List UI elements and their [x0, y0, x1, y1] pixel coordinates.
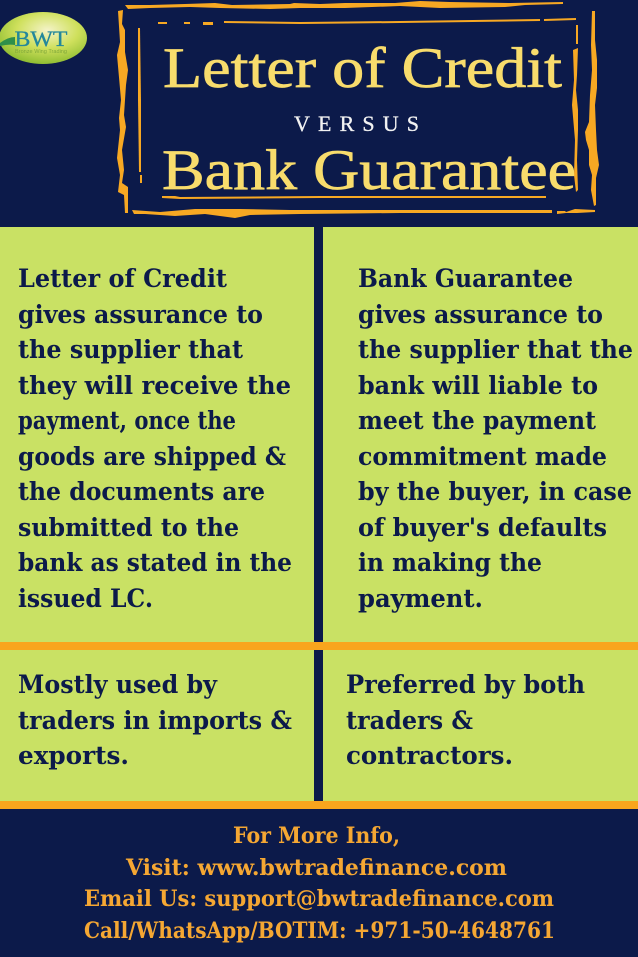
panel: letter of credit description: the documents are: [18, 477, 265, 507]
subtitle: versus: VERSUS: [294, 111, 419, 136]
panel: bank guarantee description: meet the payment: [358, 406, 596, 436]
panel: letter of credit description: goods are shipped &: [18, 442, 286, 472]
footer contact information: [84, 823, 555, 944]
panel: letter of credit usage: exports.: [18, 741, 129, 771]
logo: BWT: Bronze Wing Trading: [15, 49, 67, 55]
panel: bank guarantee usage: [346, 670, 585, 771]
panel: bank guarantee description: bank will liable to: [358, 371, 598, 401]
footer divider: [0, 801, 638, 809]
horizontal divider: [0, 642, 638, 650]
panel: letter of credit description: [18, 264, 292, 614]
panel: letter of credit description: bank as stated in the: [18, 548, 292, 578]
panel: letter of credit description: payment, once the: [18, 406, 236, 436]
vertical divider: [314, 227, 323, 801]
panel: letter of credit description: Letter of Credit: [18, 264, 227, 294]
comparison table background: [0, 227, 638, 801]
panel: letter of credit usage: [18, 670, 292, 771]
footer contact information: Call/WhatsApp/BOTIM: +971-50-4648761: [84, 918, 555, 944]
panel: bank guarantee description: payment.: [358, 584, 483, 614]
panel: bank guarantee usage: contractors.: [346, 741, 513, 771]
panel: bank guarantee usage: traders &: [346, 706, 473, 736]
panel: bank guarantee description: [358, 264, 633, 614]
panel: letter of credit description: issued LC.: [18, 584, 153, 614]
panel: bank guarantee description: Bank Guarantee: [358, 264, 573, 294]
footer contact information: Email Us: support@bwtradefinance.com: [84, 886, 554, 912]
panel: letter of credit usage: traders in imports &: [18, 706, 292, 736]
footer contact information: For More Info,: [233, 823, 400, 849]
panel: bank guarantee description: commitment made: [358, 442, 607, 472]
title: Letter of Credit: Letter of Credit: [163, 37, 562, 100]
panel: bank guarantee usage: Preferred by both: [346, 670, 585, 700]
footer contact information: Visit: www.bwtradefinance.com: [125, 855, 507, 881]
panel: bank guarantee description: of buyer's defaults: [358, 513, 607, 543]
panel: letter of credit description: they will receive the: [18, 371, 291, 401]
logo: BWT: BWT: [14, 26, 68, 51]
panel: bank guarantee description: gives assurance to: [358, 300, 603, 330]
title: Bank Guarantee: Bank Guarantee: [162, 139, 576, 202]
logo: BWT: [0, 12, 87, 64]
panel: letter of credit usage: Mostly used by: [18, 670, 218, 700]
panel: letter of credit description: gives assurance to: [18, 300, 263, 330]
decorative title frame: [117, 1, 599, 218]
panel: letter of credit description: the supplier that: [18, 335, 243, 365]
panel: bank guarantee description: in making the: [358, 548, 542, 578]
panel: letter of credit description: submitted to the: [18, 513, 239, 543]
